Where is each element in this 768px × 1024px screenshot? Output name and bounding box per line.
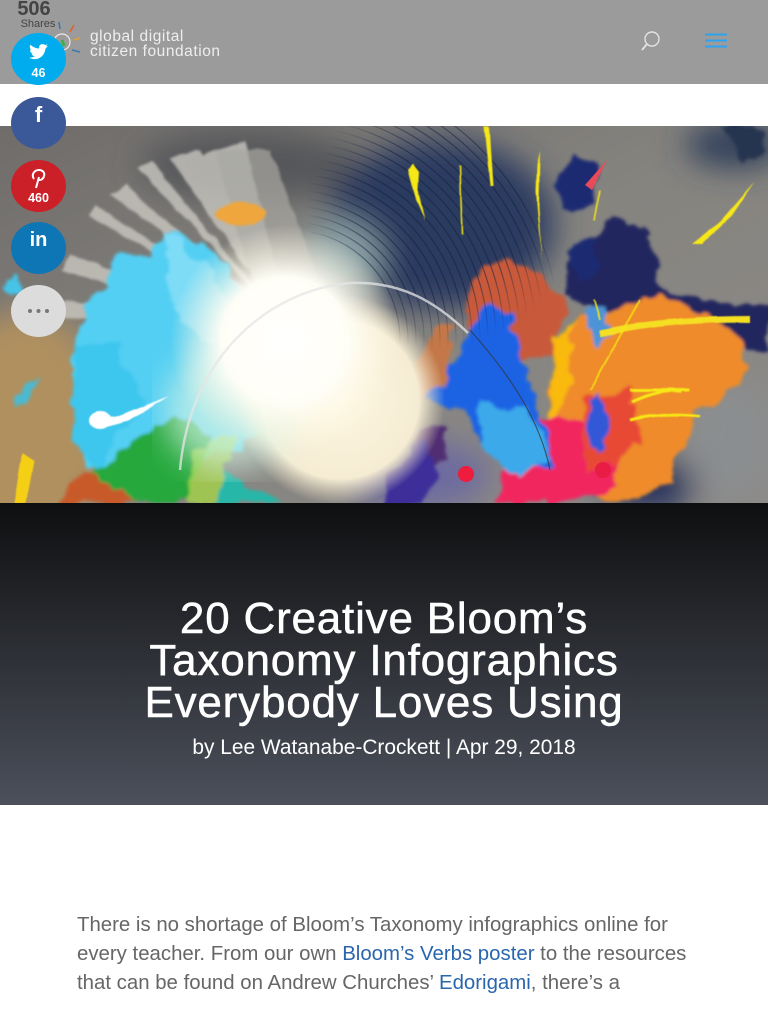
body paragraph: every teacher. From our own Bloom’s Verbs poster to the resources (77, 943, 686, 965)
more button (11, 285, 66, 337)
icon: linkedin: in (30, 229, 47, 251)
logo text: global digital (90, 28, 184, 45)
pinterest count: 460 (28, 191, 49, 205)
body paragraph (77, 914, 686, 994)
title (144, 594, 624, 727)
twitter button (11, 33, 66, 85)
icon: pinterest (32, 169, 46, 188)
logo text (90, 28, 221, 60)
icon: facebook: f (35, 102, 42, 127)
hero image: abstract paint splash (0, 126, 768, 503)
icon: search (641, 31, 660, 50)
icon: twitter (29, 44, 48, 60)
yellow splashes (14, 126, 755, 503)
twitter count: 46 (32, 66, 45, 80)
byline: by Lee Watanabe-Crockett | Apr 29, 2018 (192, 736, 576, 759)
green and orange corner (88, 417, 215, 503)
shares label: Shares (21, 18, 55, 30)
body paragraph: that can be found on Andrew Churches’ Edorigami, there’s a (77, 972, 620, 994)
navy splat (563, 220, 768, 352)
body paragraph: There is no shortage of Bloom’s Taxonomy infographics online for (77, 914, 668, 936)
title: 20 Creative Bloom’s (180, 594, 588, 643)
icon: logo bulb (54, 22, 80, 53)
share count (17, 0, 55, 30)
icon: menu (705, 34, 727, 48)
mesh lines (314, 126, 552, 345)
icon: dots (28, 309, 49, 313)
header bar (0, 0, 768, 84)
light streaks (55, 140, 320, 330)
cyan paint (70, 230, 295, 475)
title: Everybody Loves Using (144, 678, 624, 727)
facebook button (11, 97, 66, 149)
pinterest button (11, 160, 66, 212)
title: Taxonomy Infographics (149, 636, 619, 685)
bright light burst (235, 295, 445, 505)
logo text: citizen foundation (90, 43, 221, 60)
arc lines (180, 283, 468, 470)
orange, blue and magenta paint (460, 260, 565, 365)
linkedin button (11, 222, 66, 274)
title panel (0, 503, 768, 805)
